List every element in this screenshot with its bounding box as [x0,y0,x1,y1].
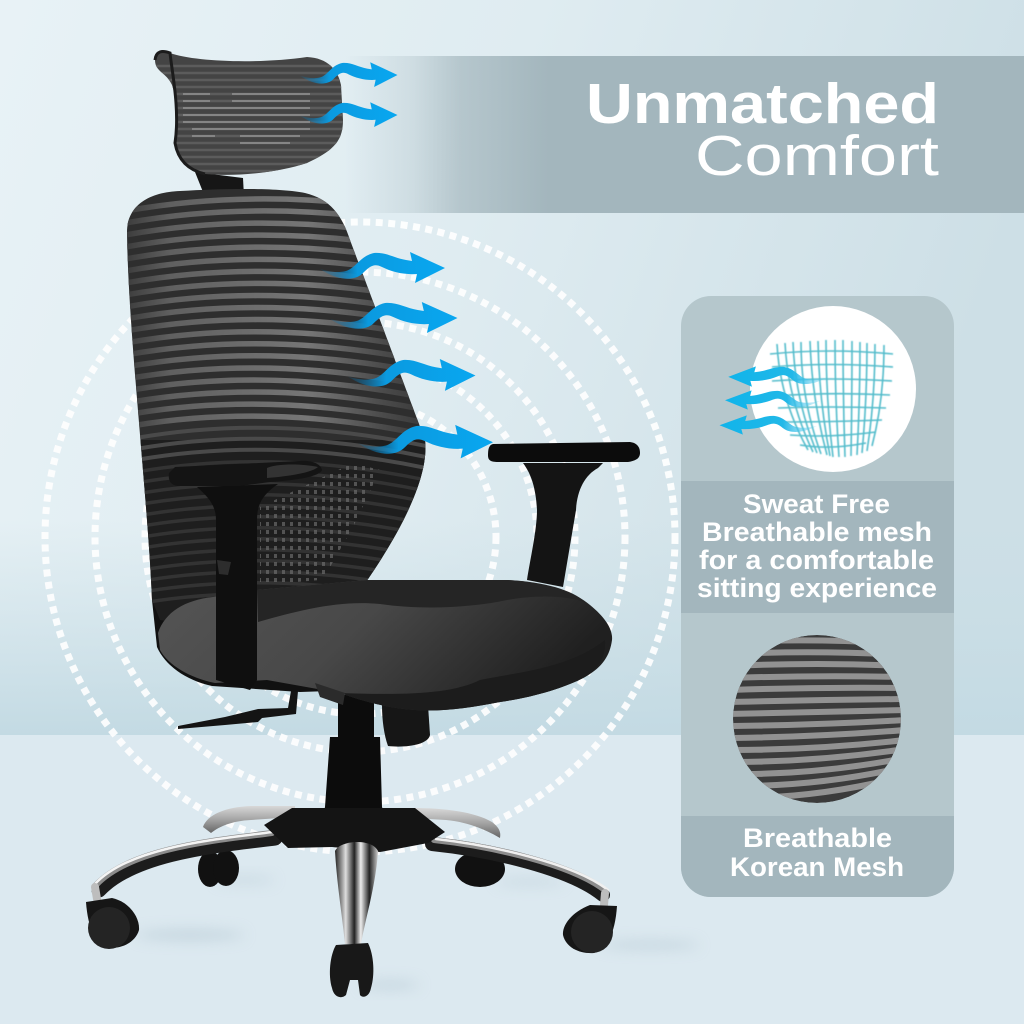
right chrome leg [432,839,608,905]
seat tag [315,683,345,705]
office chair [86,45,640,997]
dotted ripple circles [45,222,675,852]
seat underside shade [340,640,605,711]
left armrest [169,461,322,690]
floor [0,735,1024,1024]
arm adjust button [217,560,231,575]
headrest edge [155,51,205,174]
floor shadows [135,877,700,989]
back casters [198,850,505,887]
title line 2: Comfort [695,124,939,188]
caption strip: korean mesh: Korean Mesh [730,852,904,882]
caption strip: sweat free: Breathable mesh [702,517,932,547]
caption strip: sweat free [681,481,954,613]
arm pad highlight [267,464,318,478]
right caster [563,905,617,953]
left chrome leg [95,832,275,899]
seat back mesh [120,185,440,675]
back chrome legs [203,806,500,838]
left arm post [197,484,278,690]
chair base [86,691,617,997]
title banner [345,56,1024,213]
caption strip: sweat free: sitting experience [697,573,937,603]
right armrest [488,442,640,587]
left arm pad [169,461,322,486]
airflow arrows [300,62,493,458]
seat cushion [158,580,612,711]
caption strip: korean mesh: Breathable [743,823,892,853]
wall lower shade [0,520,1024,735]
headrest mesh [155,53,343,175]
height lever [178,691,298,729]
icon arrows [720,366,827,435]
headrest bracket [195,172,244,197]
title line 1: Unmatched [586,72,939,136]
right arm pad [488,442,640,462]
info panel [681,296,954,897]
front chrome leg [335,842,378,944]
hub [264,808,445,852]
background wall [0,0,1024,735]
mesh swatch [730,635,905,803]
seat top surface [257,580,585,622]
seat knob [382,705,430,747]
front caster [330,943,373,997]
caption strip: korean mesh [681,816,954,897]
gas lift column [322,695,386,818]
icon: breathable mesh [720,306,916,472]
right arm post [523,463,603,587]
left caster [86,898,139,949]
seat rear shell [152,600,360,692]
caption strip: sweat free: for a comfortable [699,545,934,575]
caption strip: sweat free: Sweat Free [743,489,890,519]
